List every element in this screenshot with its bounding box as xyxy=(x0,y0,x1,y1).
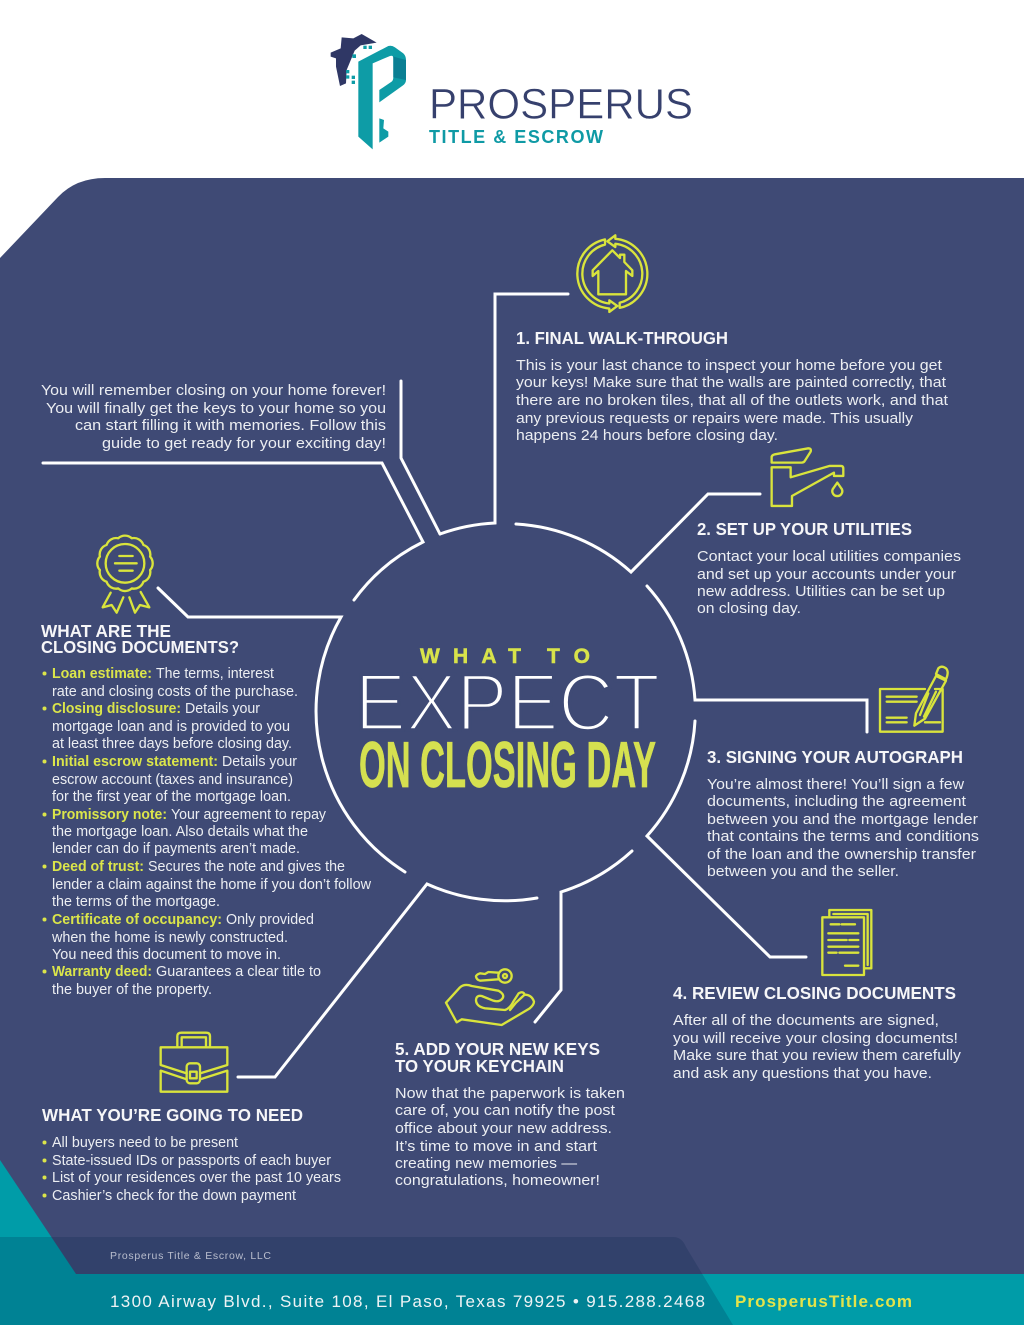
what you're going to need: Cashier’s check for the down payment xyxy=(52,1188,296,1204)
icon: house with circular arrows xyxy=(577,235,647,312)
logo mark xyxy=(331,34,406,149)
step 1: final walk-through: there are no broken tiles, that all of the outlets work, and that xyxy=(516,393,948,409)
step 4: review closing documents xyxy=(673,983,962,1082)
closing documents list: the mortgage loan. Also details what the xyxy=(52,824,308,840)
dark footer band xyxy=(0,1237,733,1325)
intro text xyxy=(41,383,386,452)
what you're going to need: WHAT YOU’RE GOING TO NEED xyxy=(42,1105,303,1125)
step 3: signing your autograph: that contains the terms and conditions xyxy=(707,829,979,845)
step 5: add your new keys: It’s time to move in and start xyxy=(395,1139,597,1155)
footer address: 1300 Airway Blvd., Suite 108, El Paso, Texas 79925 • 915.288.2468 xyxy=(110,1292,705,1311)
closing documents list: the terms of the mortgage. xyxy=(52,894,220,910)
what you're going to need xyxy=(42,1105,341,1204)
intro text: guide to get ready for your exciting day! xyxy=(102,436,386,452)
logo xyxy=(331,34,693,149)
what you're going to need: All buyers need to be present xyxy=(52,1135,238,1151)
closing documents heading: CLOSING DOCUMENTS? xyxy=(41,637,239,657)
teal footer base xyxy=(0,1150,1024,1325)
title line: on closing day: ON CLOSING DAY xyxy=(359,728,656,801)
closing documents list: Closing disclosure: xyxy=(52,701,181,717)
step 5: add your new keys: creating new memories — xyxy=(395,1156,577,1172)
closing documents list: The terms, interest xyxy=(156,666,274,682)
step 2: set up utilities: and set up your accounts under your xyxy=(697,567,956,583)
closing documents heading xyxy=(41,621,239,657)
title line: what to: WHAT xyxy=(420,645,521,668)
closing documents list: escrow account (taxes and insurance) xyxy=(52,772,293,788)
logo tagline: TITLE & ESCROW xyxy=(429,127,603,147)
closing documents list: rate and closing costs of the purchase. xyxy=(52,684,298,700)
step 5: add your new keys: office about your new address. xyxy=(395,1121,612,1137)
step 4: review closing documents: 4. REVIEW CLOSING DOCUMENTS xyxy=(673,983,956,1003)
closing documents list: Warranty deed: xyxy=(52,964,152,980)
icon: hand holding key xyxy=(446,969,534,1025)
step 3: signing your autograph: between you and the seller. xyxy=(707,864,899,880)
step 1: final walk-through: 1. FINAL WALK-THROUGH xyxy=(516,328,728,348)
step 5: add your new keys: 5. ADD YOUR NEW KEYS xyxy=(395,1039,600,1059)
icon: award ribbon xyxy=(97,536,153,613)
closing documents list: Details your xyxy=(222,754,297,770)
step 5: add your new keys: Now that the paperwork is taken xyxy=(395,1086,625,1102)
step 4: review closing documents: Make sure that you review them carefully xyxy=(673,1048,962,1064)
icon: signed document with pencil xyxy=(880,667,948,732)
closing documents list: Deed of trust: xyxy=(52,859,144,875)
icon: briefcase xyxy=(161,1033,227,1092)
closing documents list: lender a claim against the home if you don’t follow xyxy=(52,877,372,893)
step 4: review closing documents: After all of the documents are signed, xyxy=(673,1013,939,1029)
footer company name: Prosperus Title & Escrow, LLC xyxy=(110,1250,271,1262)
closing documents list: Details your xyxy=(185,701,260,717)
step 5: add your new keys: TO YOUR KEYCHAIN xyxy=(395,1056,564,1076)
icon: stack of documents xyxy=(822,910,871,975)
icon: faucet xyxy=(772,448,843,506)
title line: what to: TO xyxy=(547,645,590,668)
closing documents heading: WHAT ARE THE xyxy=(41,621,171,641)
title line: expect: EXPECT xyxy=(355,658,660,748)
step 3: signing your autograph: of the loan and the ownership transfer xyxy=(707,847,976,863)
central circle with connector lines xyxy=(43,294,867,1077)
step 2: set up utilities: 2. SET UP YOUR UTILITIES xyxy=(697,519,912,539)
step 3: signing your autograph: You’re almost there! You’ll sign a few xyxy=(707,777,964,793)
step 5: add your new keys: congratulations, homeowner! xyxy=(395,1173,600,1189)
step 4: review closing documents: and ask any questions that you have. xyxy=(673,1066,932,1082)
what you're going to need: State-issued IDs or passports of each buyer xyxy=(52,1153,331,1169)
intro text: You will remember closing on your home forever! xyxy=(41,383,386,399)
closing documents list: You need this document to move in. xyxy=(52,947,281,963)
closing documents list: Your agreement to repay xyxy=(171,807,327,823)
title xyxy=(355,645,660,801)
closing documents list xyxy=(41,621,372,998)
step 1: final walk-through: This is your last chance to inspect your home before you get xyxy=(516,358,942,374)
closing documents list: Initial escrow statement: xyxy=(52,754,218,770)
closing documents list: when the home is newly constructed. xyxy=(51,930,288,946)
closing documents list: at least three days before closing day. xyxy=(52,736,292,752)
intro text: You will finally get the keys to your home so you xyxy=(46,401,386,417)
step 1: final walk-through: happens 24 hours before closing day. xyxy=(516,428,778,444)
closing documents list: the buyer of the property. xyxy=(52,982,212,998)
closing documents list: mortgage loan and is provided to you xyxy=(52,719,290,735)
step 3: signing your autograph: between you and the mortgage lender xyxy=(707,812,978,828)
step 4: review closing documents: you will receive your closing documents! xyxy=(673,1031,958,1047)
closing documents list: for the first year of the mortgage loan. xyxy=(52,789,291,805)
step 1: final walk-through: your keys! Make sure that the walls are painted correctly, that xyxy=(516,375,946,391)
step 2: set up utilities: new address. Utilities can be set up xyxy=(697,584,945,600)
step 5: add your new keys: care of, you can notify the post xyxy=(395,1103,615,1119)
closing documents list: Promissory note: xyxy=(52,807,167,823)
step 3: signing your autograph: 3. SIGNING YOUR AUTOGRAPH xyxy=(707,747,963,767)
closing documents list: lender can do if payments aren’t made. xyxy=(52,841,300,857)
step 5: add your new keys xyxy=(395,1039,625,1189)
step 3: signing your autograph: documents, including the agreement xyxy=(707,794,966,810)
step 3: signing your autograph xyxy=(707,747,979,880)
intro text: can start filling it with memories. Follow this xyxy=(75,418,386,434)
logo wordmark: PROSPERUS xyxy=(429,80,693,128)
closing documents list: Only provided xyxy=(226,912,314,928)
step 1: final walk-through: any previous requests or repairs were made. This usually xyxy=(516,411,914,427)
closing documents list: Certificate of occupancy: xyxy=(52,912,222,928)
closing documents list: Secures the note and gives the xyxy=(148,859,345,875)
footer xyxy=(110,1250,912,1311)
step 2: set up utilities: on closing day. xyxy=(697,601,801,617)
step 2: set up utilities: Contact your local utilities companies xyxy=(697,549,961,565)
step 2: set up utilities xyxy=(697,519,961,617)
footer website: ProsperusTitle.com xyxy=(735,1292,912,1311)
what you're going to need: List of your residences over the past 10 years xyxy=(52,1170,341,1186)
title line: what to xyxy=(420,645,590,668)
closing documents list: Loan estimate: xyxy=(52,666,152,682)
closing documents list: Guarantees a clear title to xyxy=(156,964,321,980)
step 1: final walk-through xyxy=(516,328,948,444)
